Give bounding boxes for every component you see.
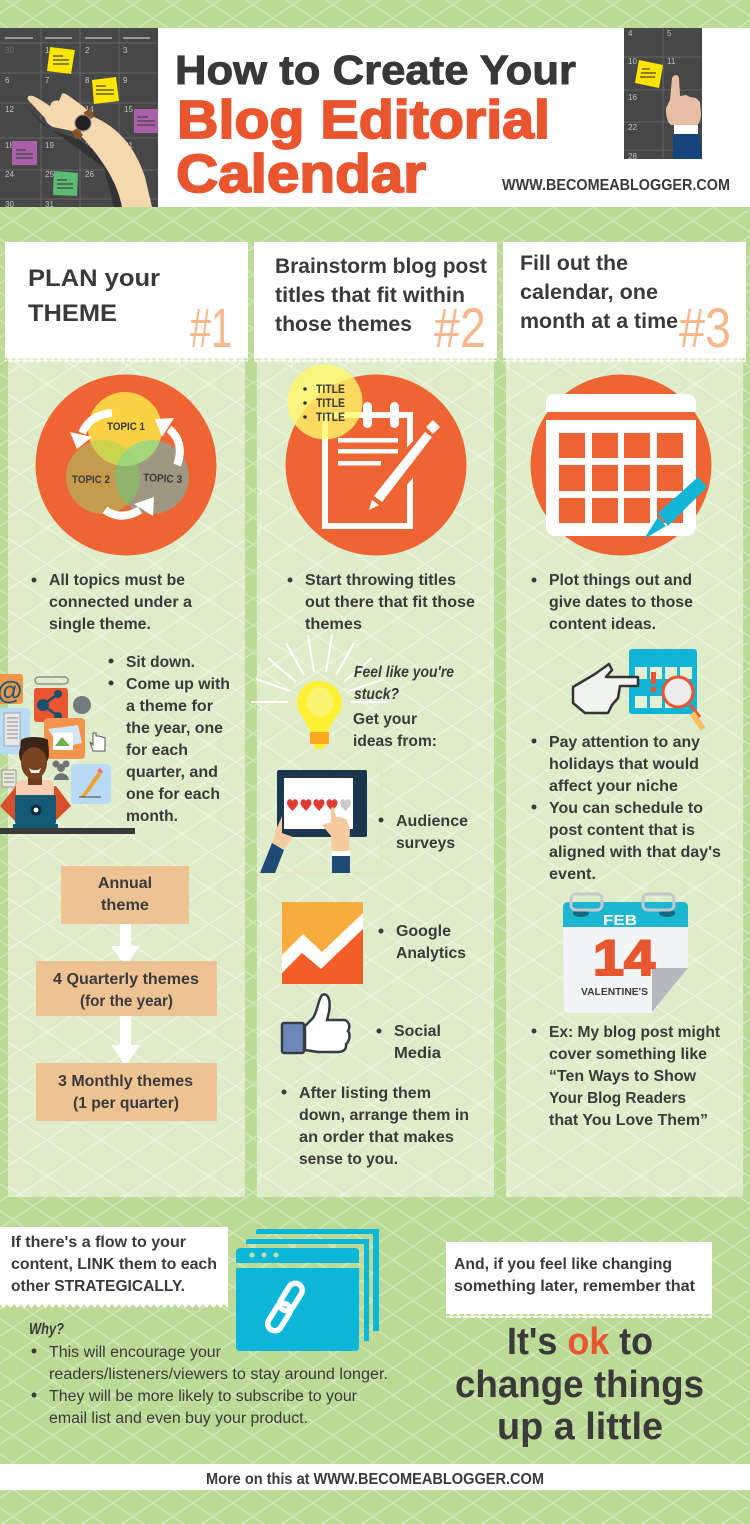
bullet text: google analytics: Google [396,923,451,940]
callout: feel like changing: And, if you feel like changing [454,1256,672,1273]
illustration: small calendar with hand [624,28,702,161]
bullet text: social media [376,1023,441,1062]
icon: three overlapping topics: TOPIC 3 [143,472,182,486]
illustration: calendar with pointing hand: 12 [5,105,14,114]
flow box: annual theme: theme [101,897,149,914]
step 2 header [254,242,497,362]
icon: google analytics logo [282,902,363,984]
text: feel like you're stuck [353,664,454,750]
bullet text: plot dates: content ideas. [549,616,656,633]
illustration: calendar with pointing hand: 3 [123,46,128,55]
icon: notepad and pencil: TITLE [316,398,345,410]
bullet text: topics connected [32,572,192,633]
icon: light bulb with rays [251,635,388,749]
bullet text: holidays: affect your niche [549,778,678,795]
bullet text: example post: that You Love Them” [549,1112,708,1129]
step 3 header: #3 [679,296,731,359]
bullet text: example post: cover something like [549,1046,707,1063]
illustration: calendar with pointing hand: 31 [45,200,54,209]
bullet text: holidays: Pay attention to any [549,734,700,751]
step 1 header: #1 [190,296,232,359]
bullet text: audience surveys: surveys [396,835,455,852]
illustration: calendar with pointing hand [0,28,158,209]
illustration: blogger at laptop with content icons [0,674,135,834]
text: feel like you're stuck: ideas from: [353,733,437,750]
text: feel like you're stuck: stuck? [354,686,399,703]
bullet text: sit down: month. [126,808,178,825]
illustration: calendar with pointing hand: 19 [45,141,54,150]
callout: feel like changing: something later, remember that [454,1278,695,1295]
heading: it's ok to change things up a little: up a little [497,1406,663,1448]
icon: three overlapping topics: TOPIC 1 [107,421,145,433]
step 2 header: Brainstorm blog post [275,255,487,278]
bullet text: holidays: You can schedule to [549,800,703,817]
icon: three overlapping topics [36,374,216,556]
bullet text: plot dates: Plot things out and [549,572,692,589]
illustration: calendar with pointing hand: 26 [85,170,94,179]
step 1 header: THEME [28,300,117,327]
text: why: readers/listeners/viewers to stay around longer. [49,1366,388,1383]
step 3 header [503,242,746,362]
bullet text: arrange titles [282,1085,469,1168]
website url: WWW.BECOMEABLOGGER.COM [502,177,730,194]
panel: step 2 [251,242,497,1197]
illustration: calendar with pointing hand: 25 [45,170,54,179]
callout: link strategically: If there's a flow to your [11,1234,186,1251]
text: why: They will be more likely to subscribe to your [49,1388,357,1405]
title [175,47,576,204]
bullet text: arrange titles: sense to you. [299,1151,398,1168]
flow box: monthly themes: 3 Monthly themes [58,1073,193,1090]
illustration: small calendar with hand: 5 [667,29,672,38]
illustration: small calendar with hand: 10 [628,57,637,66]
bullet text: throw out titles: out there that fit those [305,594,475,611]
heading: it's ok to change things up a little: change things [455,1364,704,1406]
icon: february 14 calendar page: FEB [603,912,637,929]
text: feel like you're stuck: Feel like you're [354,664,454,681]
bullet text: sit down [108,654,230,825]
bullet text: holidays: aligned with that day's [549,844,721,861]
bullet text: arrange titles: down, arrange them in [299,1107,469,1124]
icon: browser windows with chain link [236,1229,379,1351]
footer band [0,1464,750,1490]
icon: tablet survey with hearts [260,753,381,873]
step 2 header: those themes [275,313,412,336]
panel: header banner [0,28,750,209]
icon: february 14 calendar page: VALENTINE'S [581,987,648,998]
step 2 header: #2 [434,296,486,359]
bullet text: throw out titles: Start throwing titles [305,572,456,589]
bullet text: example post: “Ten Ways to Show [549,1068,697,1085]
flow box: quarterly themes: (for the year) [80,993,173,1010]
icon: notepad and pencil [286,364,466,556]
callout: link strategically: content, LINK them to each [11,1256,217,1273]
icon: thumbs up [282,994,349,1053]
bullet text: throw out titles: themes [305,616,362,633]
bullet text: arrange titles: After listing them [299,1085,431,1102]
bullet text: plot dates [532,572,693,633]
step 1 header [5,242,248,362]
illustration: calendar with pointing hand: 18 [5,141,14,150]
bullet text: sit down: Sit down. [126,654,195,671]
bullet text: sit down: a theme for [126,698,213,715]
bullet text: arrange titles: an order that makes [299,1129,454,1146]
illustration: small calendar with hand: 16 [628,93,637,102]
bullet text: sit down: the year, one [126,720,223,737]
illustration: calendar with pointing hand: 30 [5,200,14,209]
illustration: calendar with pointing hand: 21 [124,141,133,150]
panel: step 1 [0,242,248,1197]
text: why [29,1321,388,1427]
bullet text: holidays [532,734,721,883]
text: why: This will encourage your [49,1344,221,1361]
bullet text: google analytics [378,923,466,962]
callout: feel like changing [446,1242,712,1318]
illustration: small calendar with hand: 4 [628,29,633,38]
bullet text: topics connected: single theme. [49,616,151,633]
text: why: email list and even buy your product. [49,1410,308,1427]
bullet text: holidays: holidays that would [549,756,699,773]
illustration: small calendar with hand: 11 [667,57,676,66]
icon: notepad and pencil: TITLE [316,384,345,396]
illustration: calendar with pointing hand: 8 [85,76,90,85]
arrow: quarterly to monthly [111,1016,140,1066]
bullet text: sit down: one for each [126,786,220,803]
bullet text: holidays: post content that is [549,822,695,839]
illustration: calendar with pointing hand: 24 [5,170,14,179]
bullet text: example post: Your Blog Readers [549,1090,686,1107]
heading: it's ok to change things up a little: It's ok to [507,1321,653,1363]
icon: hand pointing at holiday calendar [573,649,703,729]
illustration: small calendar with hand: 22 [628,123,637,132]
bullet text: social media: Social [394,1023,441,1040]
bullet text: throw out titles [288,572,475,633]
callout: link strategically [0,1227,228,1308]
icon: three overlapping topics: TOPIC 2 [72,474,110,486]
flow box: quarterly themes: 4 Quarterly themes [53,971,199,988]
illustration: small calendar with hand: 28 [628,152,637,161]
icon: calendar with pen [530,374,712,556]
illustration: calendar with pointing hand: 30 [5,46,14,55]
title: Calendar [176,144,426,204]
flow box: monthly themes [36,1063,217,1121]
panel: step 3 [503,242,746,1197]
step 1 header: PLAN your [28,265,160,292]
flowchart: theme hierarchy [36,866,217,1121]
bullet text: social media: Media [394,1045,441,1062]
illustration: calendar with pointing hand: 14 [85,105,94,114]
bullet text: plot dates: give dates to those [549,594,693,611]
step 2 header: titles that fit within [275,284,465,307]
illustration: calendar with pointing hand: 9 [123,76,128,85]
text: feel like you're stuck: Get your [353,711,417,728]
bullet text: sit down: for each [126,742,188,759]
illustration: calendar with pointing hand: 20 [85,141,94,150]
illustration: calendar with pointing hand: 6 [5,76,10,85]
bullet text: holidays: event. [549,866,596,883]
bullet text: example post [532,1024,720,1129]
bullet text: audience surveys [378,813,468,852]
heading: it's ok to change things up a little [455,1321,704,1448]
title: How to Create Your [175,47,576,93]
flow box: annual theme: Annual [98,875,152,892]
illustration: calendar with pointing hand: 15 [124,105,133,114]
icon: february 14 calendar page [563,894,688,1013]
flow box: quarterly themes [36,961,217,1016]
flow box: annual theme [61,866,189,924]
bullet text: audience surveys: Audience [396,813,468,830]
bullet text: topics connected: All topics must be [49,572,185,589]
bullet text: sit down: Come up with [126,676,230,693]
footer band: More on this at WWW.BECOMEABLOGGER.COM [206,1471,544,1488]
title: Blog Editorial [177,90,550,150]
illustration: calendar with pointing hand: 2 [85,46,90,55]
flow box: monthly themes: (1 per quarter) [73,1095,179,1112]
text: why: Why? [29,1321,64,1338]
step 3 header: Fill out the [520,252,628,275]
icon: notepad and pencil: TITLE [316,412,345,424]
bullet text: sit down: quarter, and [126,764,218,781]
illustration: calendar with pointing hand: 1 [45,46,50,55]
step 3 header: month at a time [520,310,678,333]
bullet text: example post: Ex: My blog post might [549,1024,720,1041]
bullet text: topics connected: connected under a [49,594,192,611]
step 3 header: calendar, one [520,281,658,304]
illustration: calendar with pointing hand: 7 [45,76,50,85]
bullet text: google analytics: Analytics [396,945,466,962]
callout: link strategically: other STRATEGICALLY. [11,1278,185,1295]
arrow: annual to quarterly [111,924,140,966]
icon: february 14 calendar page: 14 [593,930,655,986]
